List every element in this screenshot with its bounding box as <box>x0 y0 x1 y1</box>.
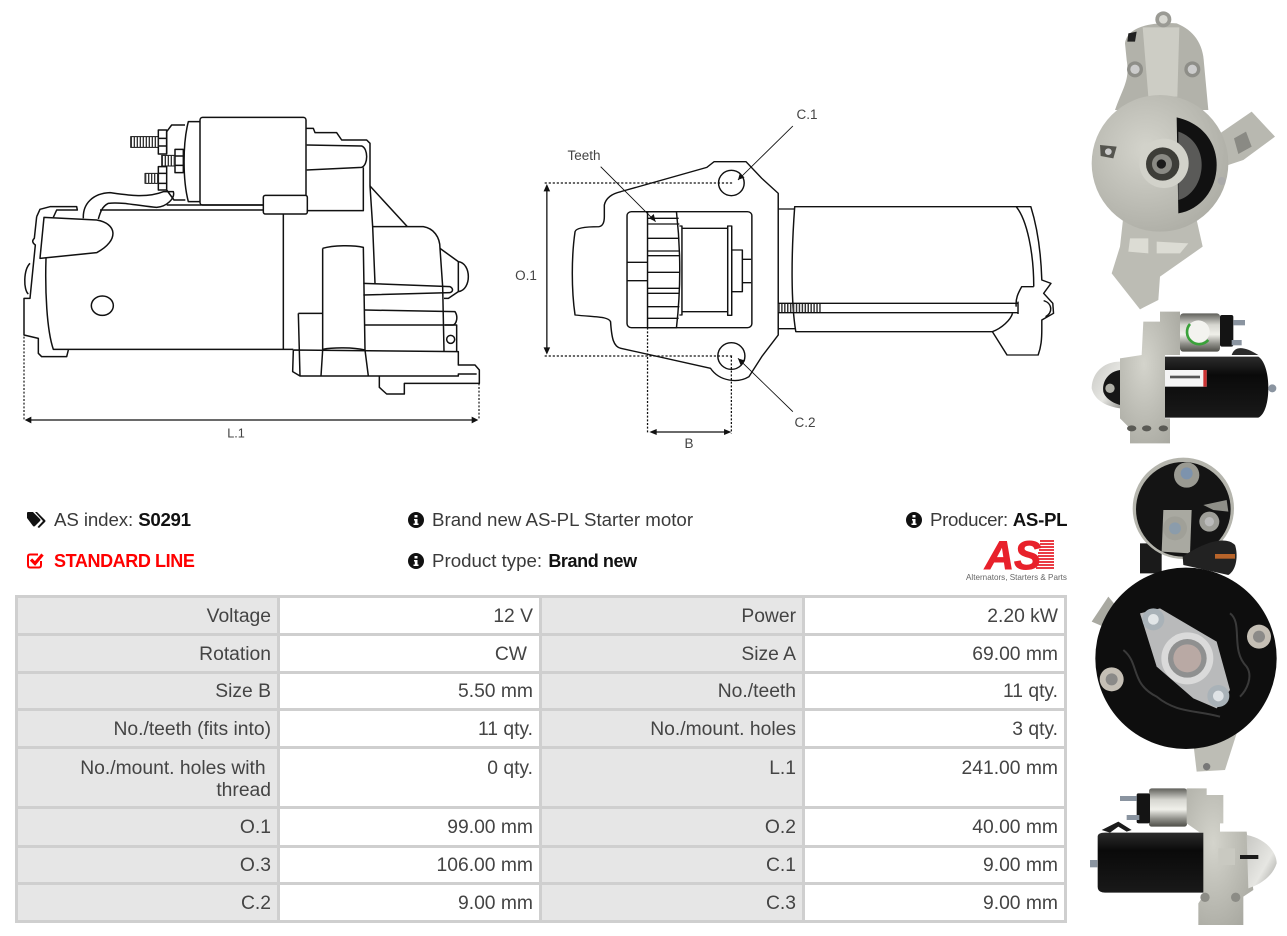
specifications table: 99.00 mm <box>447 817 533 838</box>
front view line drawing with O.1, B, C.1, C.2, Teeth dimensions <box>544 126 1054 435</box>
logo: AS Alternators, Starters & Parts <box>966 536 1067 582</box>
drive end housing <box>293 128 479 394</box>
label: B: B <box>684 436 694 451</box>
icon: check square <box>27 554 44 568</box>
text: product type: Product type: Brand new <box>432 550 637 571</box>
specifications table: 11 qty. <box>478 718 533 740</box>
L.1 dimension: L.1 <box>227 427 245 441</box>
specifications table: O.3 <box>240 855 271 876</box>
specifications table: thread <box>216 780 271 801</box>
specifications table: 0 qty. <box>487 758 533 779</box>
specifications table: Voltage <box>207 606 271 626</box>
dimensions and arrows <box>544 126 793 435</box>
label: Teeth: Teeth <box>567 148 601 163</box>
product photos column <box>1090 11 1277 925</box>
specifications table: C.1 <box>766 855 796 876</box>
specifications table: 40.00 mm <box>972 817 1058 838</box>
specifications table: 9.00 mm <box>983 855 1058 876</box>
specifications table: 2.20 kW <box>987 606 1058 626</box>
motor housing and through bolt <box>778 207 1054 355</box>
logo: AS Alternators, Starters & Parts: Alternators, Starters & Parts <box>966 572 1067 582</box>
specifications table: O.2 <box>765 817 796 838</box>
wire and motor top <box>83 192 307 219</box>
specifications table: 241.00 mm <box>962 758 1058 779</box>
icon: info producer <box>906 512 922 528</box>
specifications table: No./mount. holes with <box>80 758 266 779</box>
specifications table: C.3 <box>766 892 796 914</box>
solenoid <box>131 117 306 205</box>
text: producer: Producer: AS-PL <box>930 509 1067 530</box>
text: standard line: STANDARD LINE <box>54 551 194 571</box>
specifications table: No./teeth (fits into) <box>113 718 271 740</box>
specifications table: No./mount. holes <box>650 718 796 740</box>
specifications table: Size A <box>741 644 796 664</box>
specifications table: No./teeth <box>718 681 796 702</box>
label: C.1: C.1 <box>796 107 818 122</box>
icon: info brand new <box>408 512 424 528</box>
specifications table: 5.50 mm <box>458 681 533 702</box>
specifications table: 11 qty. <box>1003 681 1058 702</box>
mounting plate <box>572 162 778 380</box>
label: O.1: O.1 <box>515 268 537 283</box>
pinion gear and spool <box>627 212 751 328</box>
photo: side view black motor with silver solenoid <box>1092 312 1276 443</box>
text: AS index: AS index: S0291 <box>54 509 191 530</box>
specifications table: 106.00 mm <box>437 855 533 876</box>
specifications table: CW <box>495 644 527 664</box>
photo: end view silver nose <box>1092 11 1275 309</box>
specifications table: O.1 <box>240 817 271 838</box>
specifications table: 9.00 mm <box>458 892 533 914</box>
photo: rear view black end cap with plate <box>1092 458 1277 772</box>
text: brand new AS-PL starter motor: Brand new AS-PL Starter motor <box>432 509 693 530</box>
icon: tags <box>27 512 46 528</box>
specifications table: Rotation <box>199 644 271 664</box>
L.1 dimension <box>24 337 479 441</box>
motor body <box>24 207 293 357</box>
side view line drawing of starter with L.1 dimension <box>23 116 480 441</box>
specifications table: L.1 <box>769 758 796 779</box>
specifications table: Size B <box>215 681 271 702</box>
photo: side view mirrored with silver housing <box>1090 788 1277 925</box>
specifications table: 9.00 mm <box>983 892 1058 914</box>
icon: info product type <box>408 553 424 569</box>
specifications table: 3 qty. <box>1012 718 1058 740</box>
specifications table: Power <box>741 606 796 626</box>
specifications table: 69.00 mm <box>972 644 1058 664</box>
specifications table: 12 V <box>493 606 533 626</box>
specifications table: C.2 <box>241 892 271 914</box>
specifications table <box>15 595 1067 923</box>
label: C.2: C.2 <box>794 415 816 430</box>
